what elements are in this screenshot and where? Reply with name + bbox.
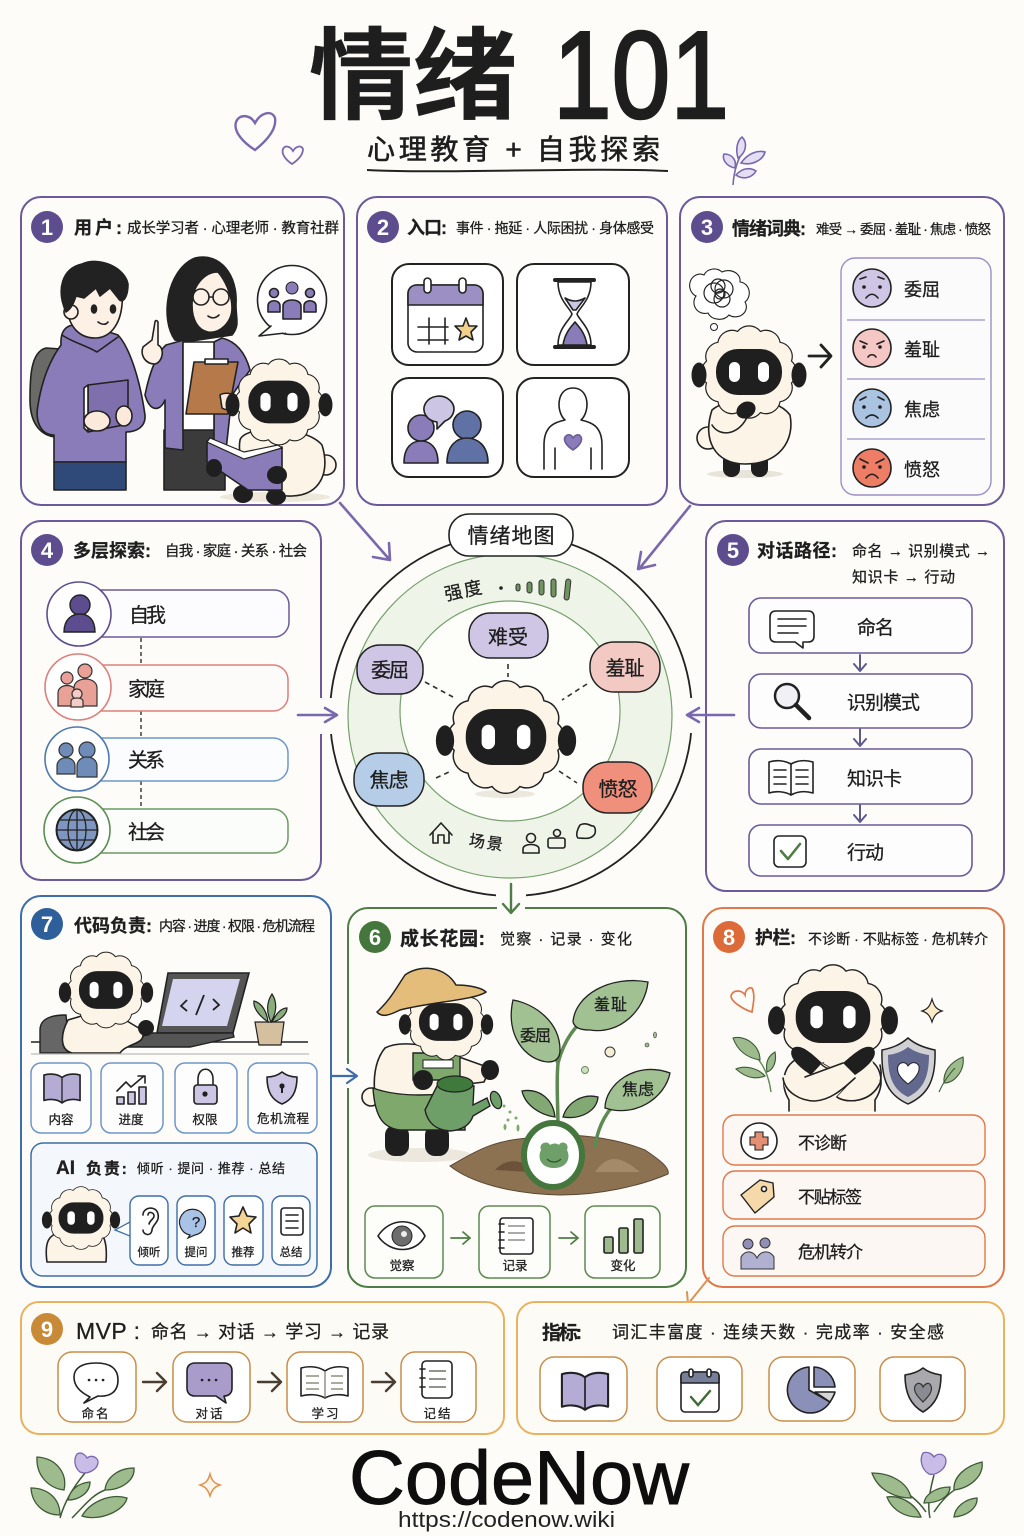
row: 不诊断 (723, 1115, 985, 1165)
layer: 自我 (47, 582, 289, 646)
emotion: 羞耻: 羞耻 (904, 340, 940, 360)
illustration: soil and seedling: 焦虑 (622, 1081, 654, 1099)
heading 5 (757, 541, 990, 586)
chip: 总结: 总结 (280, 1245, 302, 1259)
icon: body with heart (517, 378, 629, 477)
illustration: AI sheep (42, 1187, 120, 1262)
illustration: teacher (142, 257, 250, 490)
scenes: 场景 (468, 832, 504, 854)
emotion: 焦虑 (853, 389, 940, 427)
icon: left flower (31, 1453, 134, 1518)
row: 不贴标签 (723, 1171, 985, 1219)
badge 9: 9 (41, 1317, 53, 1342)
illustration: gardener sheep (362, 968, 520, 1162)
tile: 记录 (479, 1206, 550, 1278)
emotion: 委屈 (853, 269, 940, 307)
dashed connectors (140, 638, 142, 809)
heading 5: 知识卡 → 行动 (852, 569, 955, 586)
subheading: AI: 负责: (86, 1159, 127, 1178)
step: 命名: 命名 (857, 617, 894, 639)
badge 6 (359, 921, 391, 953)
dashed links (425, 664, 587, 783)
tile: 对话: 对话 (196, 1407, 222, 1421)
step: 命名 (749, 598, 972, 653)
chip: 推荐: 推荐 (232, 1245, 254, 1259)
illustration: coding sheep (31, 952, 309, 1054)
tile: 学习: 学习 (312, 1406, 338, 1421)
heading 7: 代码负责: (74, 916, 152, 936)
illustration: soil and seedling: 羞耻 (594, 996, 627, 1014)
arrow: panel 5 to map (687, 708, 734, 722)
emotion list (841, 258, 991, 495)
heading: metrics: 指标: (542, 1322, 582, 1344)
chip: 提问 (177, 1196, 215, 1265)
badge 5 (717, 534, 749, 566)
subheading: AI (56, 1158, 285, 1179)
tile: 权限: 权限 (192, 1112, 218, 1127)
layer: 社会: 社会 (128, 821, 165, 844)
badge 1: 1 (41, 215, 53, 240)
tile: 内容: 内容 (48, 1112, 74, 1127)
emotion pill: 委屈 (357, 645, 423, 694)
scenes (430, 823, 595, 854)
icon: hearts (235, 113, 303, 164)
chip: 推荐 (224, 1196, 263, 1265)
badge 6: 6 (369, 925, 381, 950)
tile: 变化: 变化 (610, 1258, 636, 1273)
subpanel: AI responsibilities (31, 1143, 317, 1276)
badge 2: 2 (377, 215, 389, 240)
panel 4: layered exploration (21, 521, 321, 880)
illustration: student (30, 261, 145, 490)
emotion: 委屈: 委屈 (904, 280, 940, 300)
badge 9 (31, 1313, 63, 1345)
illustration: sheep with crossed arms (768, 965, 898, 1111)
url: https://codenow.wiki (398, 1507, 615, 1532)
icon: right flower (872, 1452, 982, 1518)
emotion pill: 愤怒: 愤怒 (598, 778, 638, 801)
layer: 关系: 关系 (128, 749, 165, 772)
heading 6: 成长花园: (400, 927, 485, 950)
arrow: code to garden (331, 1064, 357, 1088)
intensity scale (443, 577, 571, 605)
layer: 自我: 自我 (129, 604, 166, 627)
row: 不贴标签: 不贴标签 (798, 1188, 862, 1207)
panel 9: MVP (21, 1302, 504, 1434)
arrow: guardrails to metrics (682, 1278, 709, 1306)
heading 4: 自我 · 家庭 · 关系 · 社会 (165, 543, 307, 560)
title (309, 7, 729, 145)
emotion pill: 愤怒 (583, 762, 652, 813)
heading 5: 对话路径: (757, 541, 837, 561)
subheading: AI: 倾听 · 提问 · 推荐 · 总结 (137, 1161, 285, 1176)
badge 7 (31, 908, 63, 940)
icon: hourglass (517, 264, 629, 365)
badge 2 (367, 211, 399, 243)
chip: 提问: 提问 (184, 1245, 208, 1259)
heading 7 (74, 916, 315, 936)
panel 2: entrances (357, 197, 667, 505)
emotion pill: 焦虑: 焦虑 (370, 769, 408, 792)
layer: 家庭 (45, 654, 288, 720)
heading 6: 觉察 · 记录 · 变化 (500, 930, 632, 948)
icon: shield (882, 1038, 935, 1104)
heading 8 (755, 928, 988, 948)
tile: 记录: 记结 (424, 1407, 450, 1421)
metric: streak (657, 1357, 742, 1421)
subtitle: 心理教育 + 自我探索 (367, 134, 660, 165)
heading 4 (73, 541, 307, 561)
arrow (809, 345, 831, 367)
heading 1: 用户: (74, 217, 122, 238)
stems and leaves (547, 1013, 622, 1147)
label pill: 情绪地图 (468, 525, 554, 548)
layer: 关系 (45, 727, 288, 791)
badge 3 (691, 211, 723, 243)
layer: 家庭: 家庭 (128, 678, 165, 701)
emotion pill: 羞耻: 羞耻 (606, 657, 644, 680)
heading 2 (407, 218, 654, 238)
tile: 对话 (173, 1352, 250, 1422)
heading 9: 命名 → 对话 → 学习 → 记录 (151, 1322, 389, 1342)
heading 2: 事件 · 拖延 · 人际困扰 · 身体感受 (456, 220, 654, 236)
illustration: soil and seedling: 委屈 (520, 1027, 551, 1045)
badge 8: 8 (723, 925, 735, 950)
step: 行动 (749, 825, 972, 876)
tile: 危机流程 (248, 1063, 317, 1133)
panel: metrics (517, 1302, 1004, 1434)
emotion: 愤怒: 愤怒 (904, 460, 940, 480)
tile: 命名 (58, 1352, 136, 1422)
badge 5: 5 (727, 538, 739, 563)
panel 6: growth garden (348, 902, 686, 1287)
heading 8: 护栏: (755, 928, 796, 948)
step: 识别模式 (749, 674, 972, 728)
emotion pill: 焦虑 (354, 753, 424, 806)
chip: 倾听 (130, 1196, 168, 1265)
subheading: AI: AI (56, 1158, 75, 1179)
flow arrows (451, 1232, 578, 1244)
heading 6 (400, 927, 632, 950)
flow arrows (854, 655, 866, 822)
tile: 危机流程: 危机流程 (257, 1111, 309, 1126)
tile: 觉察: 觉察 (390, 1259, 415, 1273)
metric: safety (880, 1357, 965, 1421)
heading 1: 成长学习者 · 心理老师 · 教育社群 (127, 220, 339, 237)
step: 知识卡: 知识卡 (847, 768, 902, 790)
bubble tail (115, 1222, 130, 1236)
icon: calendar (392, 264, 503, 365)
icon: two people talking (392, 378, 503, 477)
panel 3: emotion dictionary (680, 197, 1004, 505)
illustration: thinking sheep (692, 326, 806, 478)
tile: 权限 (175, 1063, 237, 1133)
metric: vocabulary (540, 1357, 627, 1421)
panel 7: code responsibilities (21, 896, 331, 1287)
flow arrows (143, 1373, 395, 1391)
arrow: panel 4 to map (298, 708, 337, 722)
heading 4: 多层探索: (73, 541, 151, 561)
tile: 变化 (585, 1206, 660, 1278)
tile: 进度: 进度 (118, 1112, 144, 1127)
emotion pill: 羞耻 (590, 642, 660, 692)
icon: title flower (723, 137, 765, 185)
heading 9: MVP : (76, 1318, 140, 1344)
step: 知识卡 (749, 749, 972, 804)
heading 2: 入口: (407, 218, 447, 238)
outer ring: intensity and scenes (348, 554, 672, 878)
panel 5: dialogue path (706, 521, 1004, 891)
row: 不诊断: 不诊断 (798, 1134, 847, 1153)
illustration: sheep reading (206, 359, 336, 505)
tile: 学习 (287, 1352, 363, 1422)
tile: 内容 (31, 1063, 91, 1133)
tile: 命名: 命名 (82, 1406, 108, 1421)
step: 识别模式: 识别模式 (847, 692, 920, 714)
emotion pill: 难受: 难受 (488, 626, 528, 649)
connector arrows (340, 503, 690, 569)
heading 3: 难受 → 委屈 · 羞耻 · 焦虑 · 愤怒 (816, 222, 992, 237)
row: 危机转介 (723, 1226, 985, 1276)
badge 3: 3 (701, 215, 713, 240)
heading 8: 不诊断 · 不贴标签 · 危机转介 (808, 931, 988, 947)
emotion: 羞耻 (853, 329, 940, 367)
emotion pill: 难受 (469, 613, 548, 658)
illustration: speech bubble with group (258, 266, 326, 336)
center sheep (436, 681, 576, 798)
badge 4: 4 (41, 538, 54, 563)
tile: 记录 (401, 1352, 476, 1422)
emotion: 愤怒 (853, 449, 940, 487)
layer: 社会 (44, 797, 288, 863)
title: 情绪 (309, 21, 517, 133)
emotion: 焦虑: 焦虑 (904, 400, 940, 420)
badge 8 (713, 921, 745, 953)
panel 1: users (21, 197, 344, 505)
intensity scale: 强度 (443, 577, 484, 605)
tile: 觉察 (365, 1206, 443, 1278)
row: 危机转介: 危机转介 (798, 1243, 863, 1262)
chip: 提问: ? (192, 1214, 200, 1231)
tile: 进度 (101, 1063, 163, 1133)
heading 3: 情绪词典: (732, 218, 806, 239)
heading 3 (732, 218, 992, 239)
panel 8: guardrails (703, 908, 1004, 1287)
chip: 倾听: 倾听 (138, 1246, 160, 1259)
chip: 总结 (272, 1196, 310, 1265)
badge 7: 7 (41, 912, 53, 937)
heading: metrics: 词汇丰富度 · 连续天数 · 完成率 · 安全感 (612, 1323, 944, 1342)
icon: sparkle (200, 1474, 220, 1496)
icon: tangled thought bubble (690, 269, 749, 330)
seed with frog face (524, 1123, 582, 1187)
badge 4 (31, 534, 63, 566)
title: 101 (553, 7, 729, 145)
tile: 记录: 记录 (502, 1259, 528, 1273)
label pill (449, 514, 573, 556)
heading 7: 内容 · 进度 · 权限 · 危机流程 (159, 918, 315, 934)
heading 1 (74, 217, 339, 238)
decorations: heart, sparkle, leaves (731, 988, 963, 1092)
illustration: soil and seedling (450, 981, 670, 1195)
arrow: map to garden (503, 884, 519, 913)
logo: CodeNow: CodeNow (349, 1436, 690, 1521)
metric: completion (769, 1357, 855, 1421)
heading 9 (76, 1318, 389, 1344)
badge 1 (31, 211, 63, 243)
emotion pill: 委屈: 委屈 (371, 659, 409, 682)
heading 5: 命名 → 识别模式 → (852, 542, 990, 560)
center: emotion map (320, 514, 700, 899)
step: 行动: 行动 (847, 842, 884, 864)
